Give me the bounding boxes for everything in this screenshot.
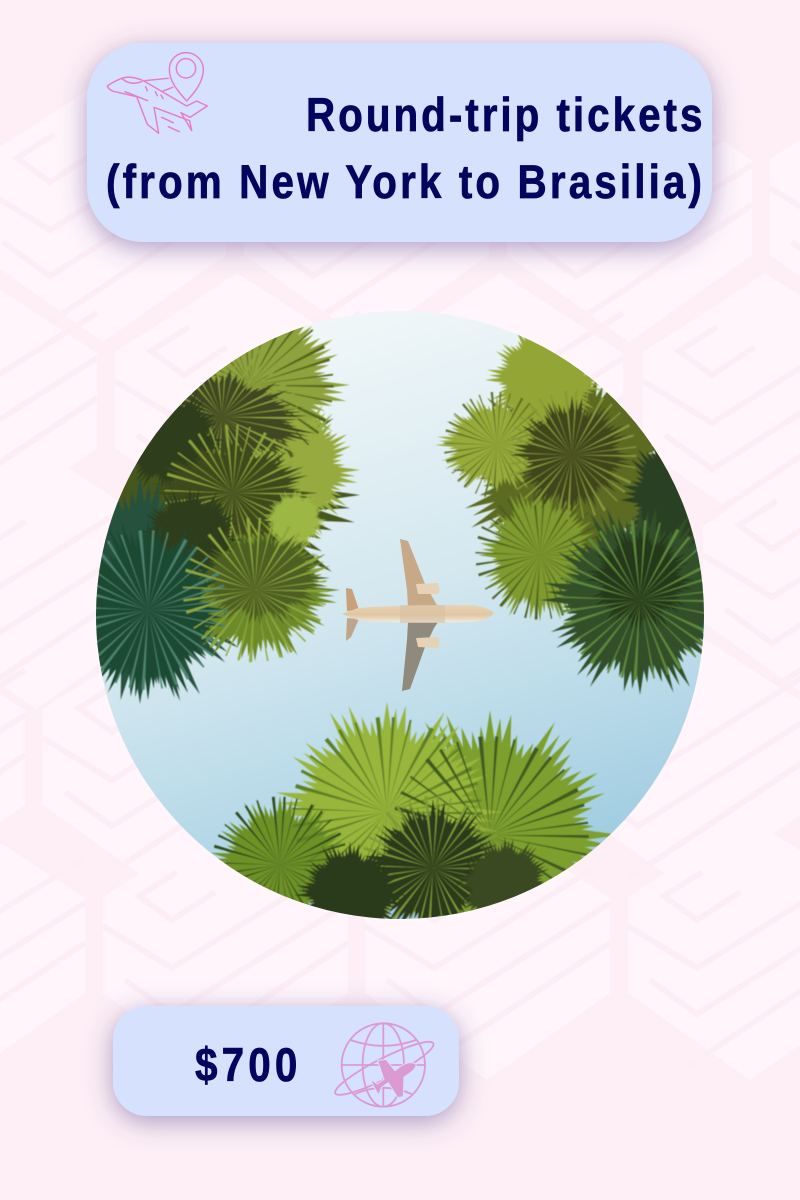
airplane bbox=[342, 539, 494, 691]
engines bbox=[416, 583, 440, 594]
heading line 1: Round-trip tickets bbox=[306, 89, 702, 142]
fuselage bbox=[342, 605, 494, 623]
lower wing bbox=[402, 622, 438, 691]
right palm cluster bbox=[436, 334, 704, 695]
icon: globe with plane bbox=[331, 1023, 438, 1107]
upper wing bbox=[400, 539, 438, 607]
icon: plane and location pin bbox=[107, 53, 207, 133]
tail bbox=[346, 588, 359, 611]
panel: price pill bbox=[113, 1006, 459, 1116]
photo: plane between palm trees bbox=[96, 311, 704, 919]
panel: title pill bbox=[87, 43, 712, 242]
bottom palm cluster bbox=[210, 702, 612, 919]
heading line 2: (from New York to Brasilia) bbox=[106, 156, 702, 209]
sky bbox=[96, 311, 704, 919]
price: $700 bbox=[195, 1039, 297, 1092]
left palm cluster bbox=[96, 326, 360, 704]
